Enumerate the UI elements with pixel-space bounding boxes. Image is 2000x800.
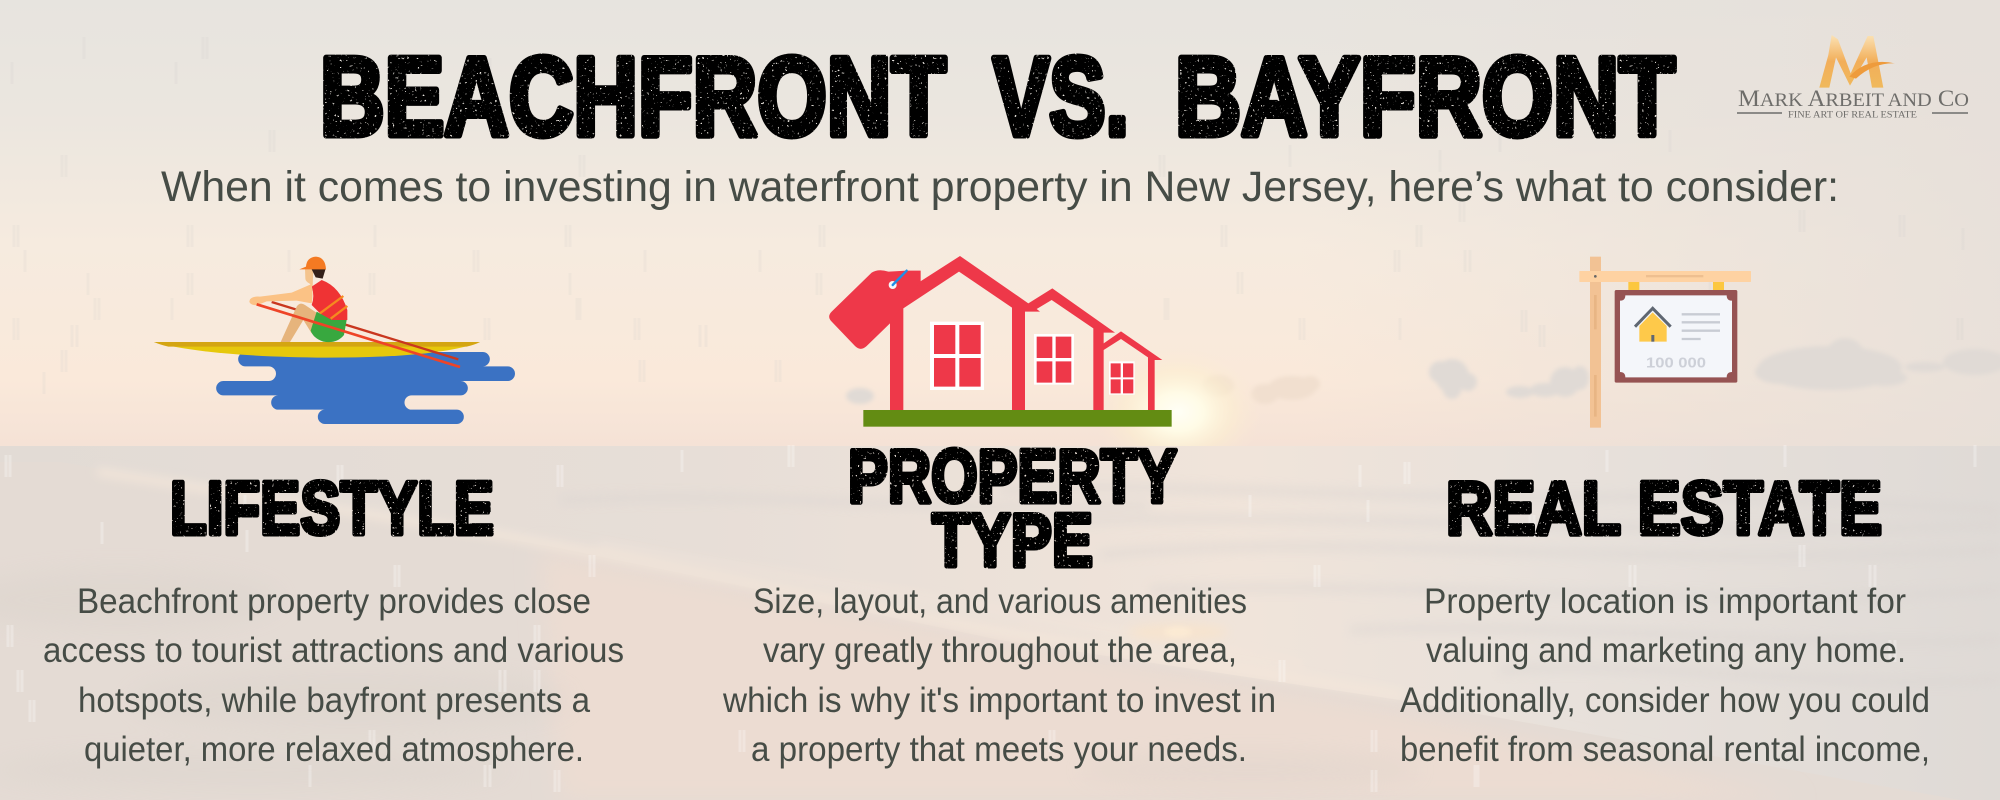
boat xyxy=(154,342,480,358)
icon: houses with price tag xyxy=(829,256,1172,427)
panel: lifestyle xyxy=(43,466,624,769)
logo: Mark Arbeit and Co: MARK ARBEIT AND CO xyxy=(1738,86,1969,111)
title: BAYFRONT xyxy=(1175,35,1675,159)
icon: rower on a boat xyxy=(154,257,515,424)
icon: real estate sign xyxy=(1579,257,1751,428)
text: property type body: which is why it's important to invest in xyxy=(722,681,1276,720)
text: lifestyle body: Beachfront property provides close xyxy=(77,582,591,621)
rower xyxy=(249,257,347,342)
text: lifestyle body: access to tourist attractions and various xyxy=(43,631,624,670)
text: real estate body xyxy=(1400,582,1930,769)
heading: property type xyxy=(848,434,1177,582)
text: lifestyle body: quieter, more relaxed atmosphere. xyxy=(84,730,584,769)
near oar xyxy=(257,304,460,367)
windows xyxy=(930,322,1135,395)
water xyxy=(216,352,515,424)
text: property type body: Size, layout, and various amenities xyxy=(753,582,1247,621)
heading: lifestyle: LIFESTYLE xyxy=(170,466,494,550)
house symbol xyxy=(1635,308,1671,342)
text: property type body: vary greatly throughout the area, xyxy=(763,631,1237,670)
heading: property type: TYPE xyxy=(932,498,1093,582)
logo M mark xyxy=(1819,35,1895,88)
lawn xyxy=(863,410,1172,427)
price tag xyxy=(829,270,921,349)
text: real estate body: Property location is important for xyxy=(1424,582,1906,621)
far oar xyxy=(272,302,458,359)
text: real estate body: benefit from seasonal rental income, xyxy=(1400,730,1930,769)
heading: real estate: REAL ESTATE xyxy=(1446,466,1882,550)
icon: real estate sign: 100 000 xyxy=(1646,355,1706,371)
text: lifestyle body: hotspots, while bayfront presents a xyxy=(78,681,591,720)
heading: property type: PROPERTY xyxy=(848,434,1177,518)
logo: Mark Arbeit and Co: FINE ART OF REAL ESTATE xyxy=(1788,110,1917,120)
title: BEACHFRONT xyxy=(320,35,946,159)
text: lifestyle body xyxy=(43,582,624,769)
text: property type body xyxy=(722,582,1276,769)
panel: real estate xyxy=(1400,466,1930,769)
text: property type body: a property that meets your needs. xyxy=(751,730,1247,769)
text: real estate body: Additionally, consider how you could xyxy=(1400,681,1930,720)
title: VS. xyxy=(993,35,1129,159)
title xyxy=(320,35,1675,159)
logo: Mark Arbeit and Co xyxy=(1737,35,1969,120)
sign board xyxy=(1615,290,1737,383)
text: real estate body: valuing and marketing any home. xyxy=(1426,631,1906,670)
panel: property type xyxy=(722,434,1276,769)
subtitle: When it comes to investing in waterfront property in New Jersey, here’s what to consider: xyxy=(161,163,1839,211)
post and beam xyxy=(1579,257,1751,428)
houses xyxy=(873,256,1162,410)
